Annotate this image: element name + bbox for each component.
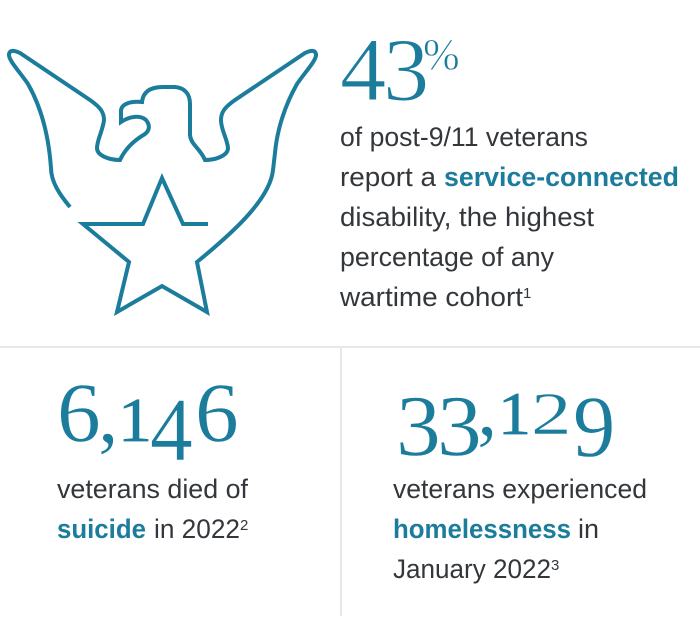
stat: 33,129	[396, 362, 615, 475]
stat: 6,146: ,	[98, 369, 118, 460]
stat: 6,146: 4	[150, 380, 193, 479]
stat: 33,129: 3	[396, 378, 441, 475]
text: service-connected description: disability, the highest	[340, 202, 595, 232]
stat: 33,129: 2	[531, 381, 572, 447]
stat: 6,146: 6	[57, 365, 101, 460]
text: homelessness description: homelessness	[393, 514, 571, 544]
stat: 6,146	[57, 365, 239, 479]
text: homelessness description: January 2022	[393, 554, 551, 584]
text: suicide description: suicide	[57, 514, 146, 544]
text: homelessness description	[393, 474, 647, 584]
text: suicide description: 2	[240, 517, 248, 534]
stat: 33,129: 3	[437, 378, 482, 475]
text: suicide description: veterans died of	[57, 474, 249, 504]
text: service-connected description: of post-9/11 veterans	[340, 122, 588, 152]
text: service-connected description: 1	[523, 285, 531, 302]
stat: 33,129: 1	[498, 381, 531, 447]
stat: 43%	[340, 20, 460, 120]
text: homelessness description: in	[578, 514, 599, 544]
text: service-connected description: wartime cohort	[339, 282, 524, 312]
text: suicide description: in 2022	[154, 514, 240, 544]
stat: 43%: 4	[340, 20, 386, 120]
text: service-connected description: service-connected	[444, 162, 679, 192]
stat: 43%: %	[423, 30, 460, 79]
stat: 43%: 3	[383, 20, 429, 120]
stat: 6,146: 6	[195, 365, 239, 460]
stat: 6,146: 1	[118, 387, 152, 455]
divider: horizontal	[0, 346, 700, 348]
stat: 33,129: 9	[573, 377, 615, 475]
stat: 33,129: ,	[477, 362, 498, 453]
text: service-connected description: report a	[340, 162, 436, 192]
divider: vertical	[340, 347, 342, 616]
text: homelessness description: 3	[551, 557, 559, 574]
text: homelessness description: veterans experienced	[393, 474, 647, 504]
text: service-connected description	[339, 122, 679, 312]
text: service-connected description: percentage of any	[340, 242, 555, 272]
text: suicide description	[57, 474, 249, 544]
icon: eagle and star	[9, 51, 316, 312]
